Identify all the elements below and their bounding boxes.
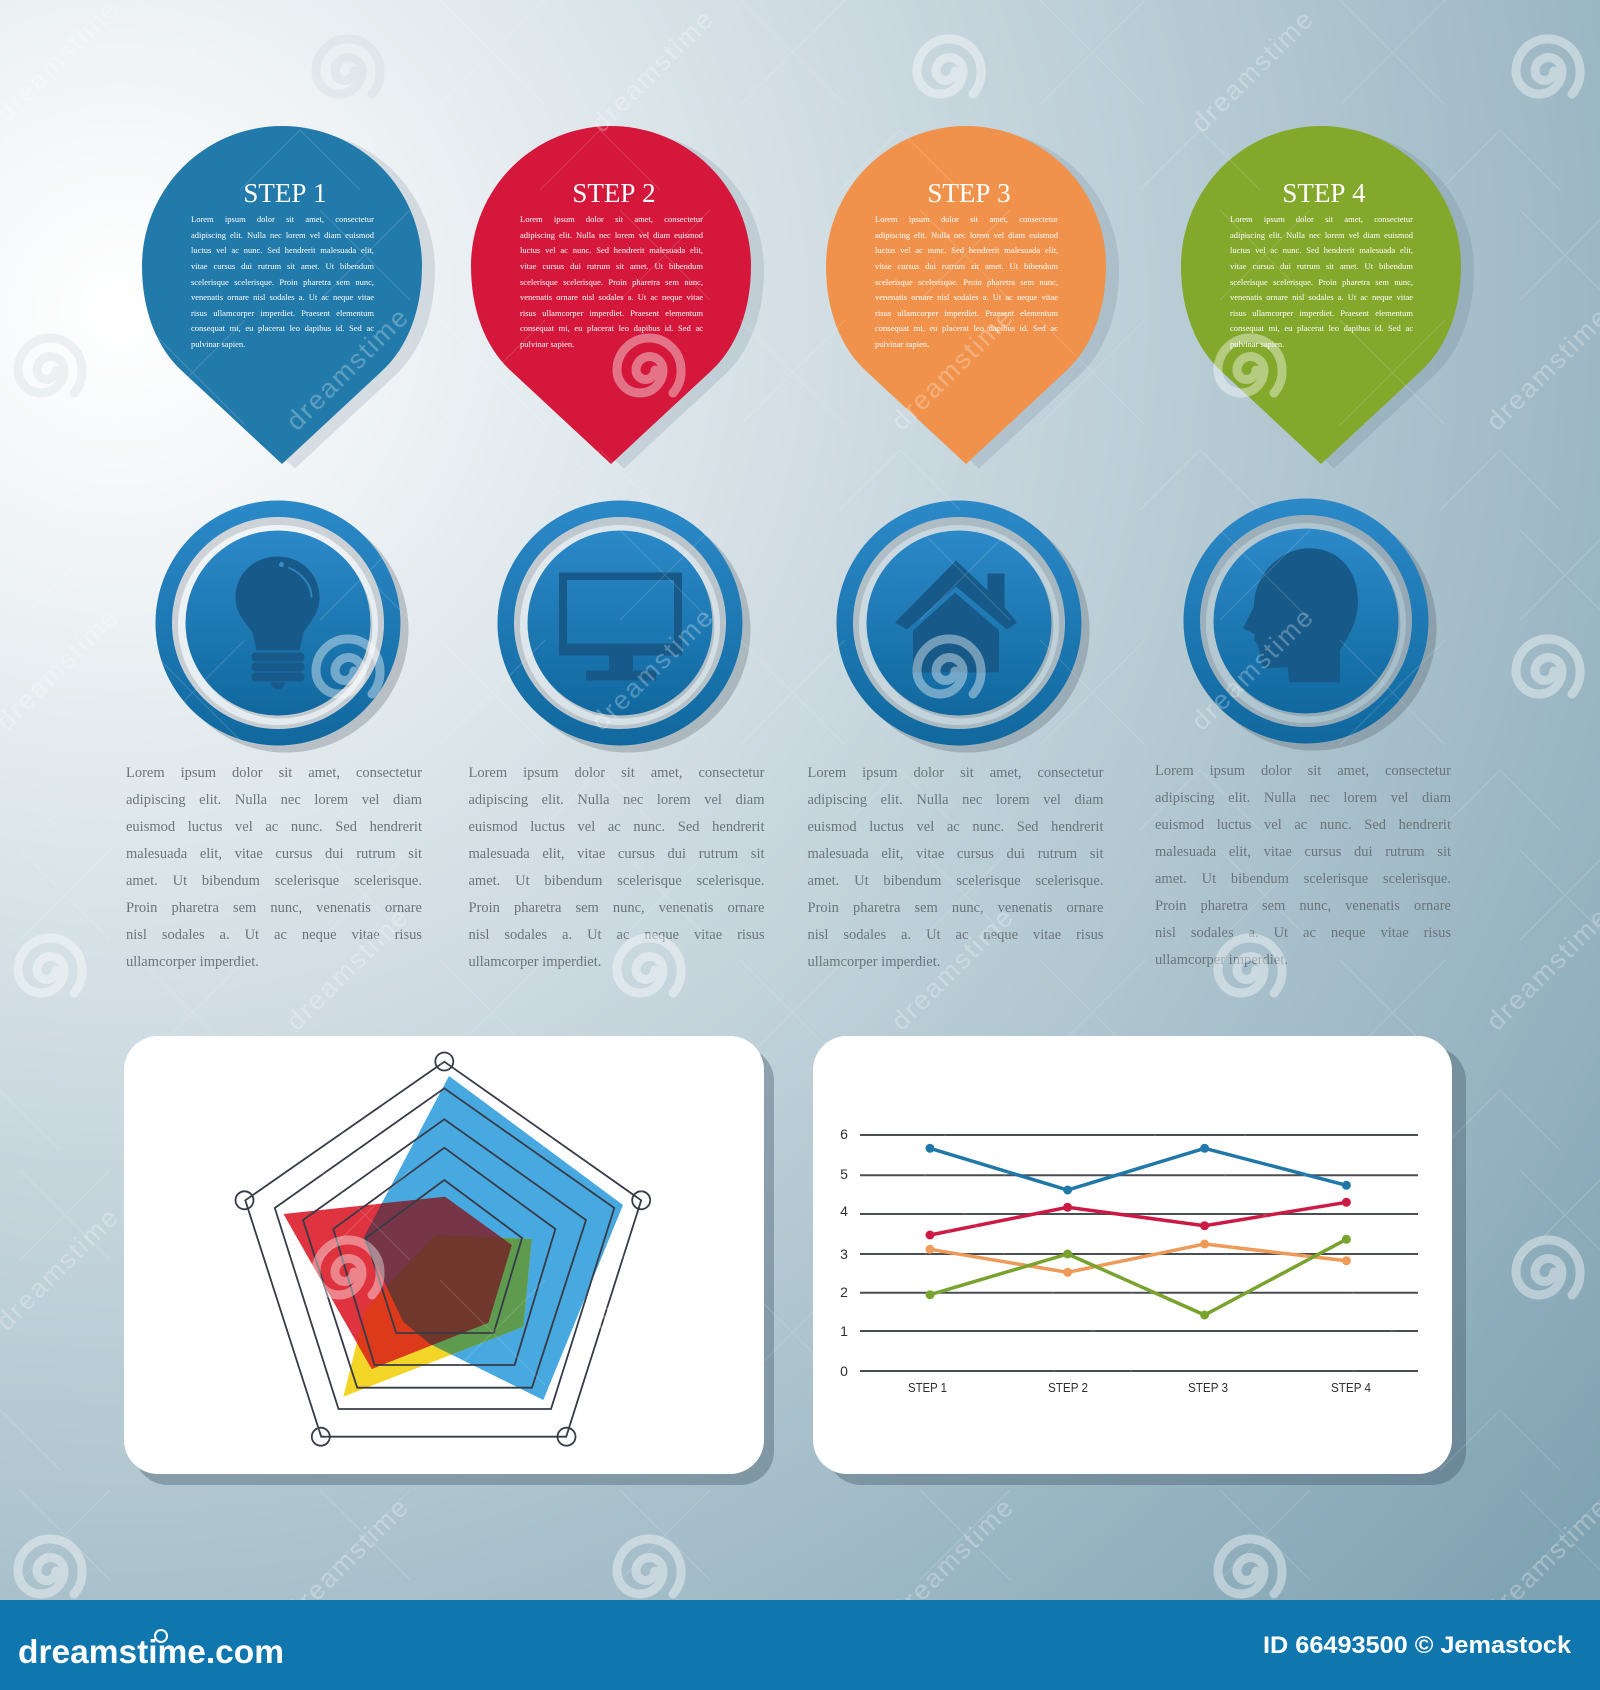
text block: paragraph 4: malesuada elit, vitae cursus dui rutrum sit [1155, 844, 1451, 860]
icon disc: house [836, 500, 1090, 752]
text block: paragraph 2: euismod luctus vel ac nunc. Sed hendrerit [468, 819, 764, 835]
text block: step 3 [875, 214, 1058, 349]
text block: paragraph 1: euismod luctus vel ac nunc. Sed hendrerit [126, 819, 422, 835]
chart axes: grid lines [860, 1135, 1418, 1371]
y axis labels: 1 [840, 1323, 848, 1339]
image id credit: ID 66493500 © Jemastock [1263, 1632, 1572, 1659]
text block: paragraph 2: ullamcorper imperdiet. [468, 954, 601, 970]
text block: paragraph 4: euismod luctus vel ac nunc. Sed hendrerit [1155, 817, 1451, 833]
x axis labels: STEP 3 [1188, 1380, 1228, 1395]
text block: step 4: venenatis ornare nisl sodales a. Ut ac neque vitae [1230, 292, 1413, 302]
y axis labels: 0 [840, 1363, 848, 1379]
panel: step 3 pin [826, 126, 1119, 468]
text block: paragraph 1: ullamcorper imperdiet. [126, 954, 259, 970]
text block: paragraph 1 [126, 764, 422, 970]
heading: step 3: STEP 3 [927, 178, 1011, 208]
x axis labels: STEP 1 [908, 1380, 947, 1395]
heading: step 1: STEP 1 [243, 178, 327, 208]
chart axes: radar grid [236, 1052, 650, 1446]
text block: step 3: luctus vel ac nunc. Sed hendrerit malesuada elit, [875, 245, 1058, 255]
panel: step 2 pin [471, 126, 764, 468]
text block: step 1: venenatis ornare nisl sodales a. Ut ac neque vitae [191, 292, 374, 302]
x axis labels: STEP 4 [1331, 1380, 1371, 1395]
text block: step 3: Lorem ipsum dolor sit amet, consectetur [875, 214, 1058, 224]
panel: radar chart card [124, 1036, 764, 1474]
text block: step 4: consequat mi, eu placerat leo dapibus id. Sed ac [1230, 323, 1413, 333]
text block: step 4: Lorem ipsum dolor sit amet, consectetur [1230, 214, 1413, 224]
text block: step 3: risus ullamcorper imperdiet. Praesent elementum [875, 308, 1058, 318]
text block: step 4: adipiscing elit. Nulla nec lorem vel diam euismod [1230, 230, 1413, 240]
text block: step 3: adipiscing elit. Nulla nec lorem vel diam euismod [875, 230, 1058, 240]
y axis labels: 5 [840, 1166, 848, 1182]
line series: blue [926, 1144, 1351, 1194]
watermark overlay: dreamstime [1185, 3, 1320, 138]
text block: step 4: luctus vel ac nunc. Sed hendrerit malesuada elit, [1230, 245, 1413, 255]
text block: paragraph 4: ullamcorper imperdiet. [1155, 952, 1288, 968]
x axis labels: STEP 2 [1048, 1380, 1088, 1395]
icon disc: head [1184, 498, 1436, 750]
line series: orange [926, 1240, 1351, 1277]
text block: paragraph 4: amet. Ut bibendum scelerisque scelerisque. [1155, 871, 1451, 887]
text block: step 4: vitae cursus dui rutrum sit amet. Ut bibendum [1230, 261, 1413, 271]
y axis labels: 6 [840, 1126, 848, 1142]
text block: paragraph 4: Lorem ipsum dolor sit amet, consectetur [1155, 762, 1451, 778]
icon: light bulb [235, 556, 319, 689]
chart series: radar areas [284, 1076, 623, 1400]
text block: paragraph 3: Lorem ipsum dolor sit amet, consectetur [808, 764, 1104, 780]
text block: paragraph 2: Lorem ipsum dolor sit amet, consectetur [468, 764, 764, 780]
logo mark [155, 1630, 167, 1642]
text block: paragraph 1: nisl sodales a. Ut ac neque vitae risus [126, 927, 422, 943]
text block: paragraph 1: adipiscing elit. Nulla nec lorem vel diam [126, 792, 422, 808]
text block: paragraph 2: nisl sodales a. Ut ac neque vitae risus [468, 927, 764, 943]
watermark overlay: dreamstime [885, 901, 1020, 1036]
text block: step 1: luctus vel ac nunc. Sed hendrerit malesuada elit, [191, 245, 374, 255]
y axis labels: 4 [840, 1203, 848, 1219]
y axis labels: 3 [840, 1246, 848, 1262]
line series: red [926, 1198, 1351, 1240]
watermark overlay: dreamstime [585, 3, 720, 138]
text block: step 2: scelerisque scelerisque. Proin pharetra sem nunc, [520, 276, 703, 286]
x axis labels [908, 1380, 1371, 1395]
icon: computer monitor [559, 572, 682, 680]
watermark overlay: dreamstime [585, 1201, 720, 1336]
text block: paragraph 2: adipiscing elit. Nulla nec lorem vel diam [468, 792, 764, 808]
logo text: dreamstime.com [18, 1633, 284, 1670]
text block: step 1: scelerisque scelerisque. Proin pharetra sem nunc, [191, 276, 374, 286]
text block: step 4: pulvinar sapien. [1230, 339, 1284, 349]
y axis labels [840, 1126, 848, 1379]
panel: line chart card [813, 1036, 1452, 1474]
panel: step 1 pin [142, 126, 435, 468]
text block: paragraph 4: adipiscing elit. Nulla nec lorem vel diam [1155, 790, 1451, 806]
text block: paragraph 2: malesuada elit, vitae cursus dui rutrum sit [468, 846, 764, 862]
watermark overlay: dreamstime [885, 301, 1020, 436]
text block: paragraph 3: amet. Ut bibendum scelerisque scelerisque. [808, 873, 1104, 889]
text block: step 1 [191, 214, 374, 349]
panel: step 4 pin [1181, 126, 1474, 468]
text block: step 3: venenatis ornare nisl sodales a. Ut ac neque vitae [875, 292, 1058, 302]
text block: step 4: risus ullamcorper imperdiet. Praesent elementum [1230, 308, 1413, 318]
text block: paragraph 3: malesuada elit, vitae cursus dui rutrum sit [808, 846, 1104, 862]
text block: paragraph 2 [468, 764, 764, 970]
text block: paragraph 3 [808, 764, 1104, 970]
icon: human head profile [1243, 548, 1358, 682]
text block: paragraph 3: adipiscing elit. Nulla nec lorem vel diam [808, 792, 1104, 808]
text block: paragraph 3: Proin pharetra sem nunc, venenatis ornare [808, 900, 1104, 916]
y axis labels: 2 [840, 1284, 848, 1300]
text block: step 4 [1230, 214, 1413, 349]
heading: step 2: STEP 2 [572, 178, 656, 208]
text block: step 3: scelerisque scelerisque. Proin pharetra sem nunc, [875, 276, 1058, 286]
text block: step 2: pulvinar sapien. [520, 339, 574, 349]
watermark overlay: dreamstime [585, 601, 720, 736]
text block: step 2: vitae cursus dui rutrum sit amet. Ut bibendum [520, 261, 703, 271]
text block: step 3: vitae cursus dui rutrum sit amet. Ut bibendum [875, 261, 1058, 271]
text block: paragraph 3: ullamcorper imperdiet. [808, 954, 940, 970]
icon: house [895, 560, 1017, 672]
text block: step 1: consequat mi, eu placerat leo dapibus id. Sed ac [191, 323, 374, 333]
text block: step 1: vitae cursus dui rutrum sit amet. Ut bibendum [191, 261, 374, 271]
text block: paragraph 4: nisl sodales a. Ut ac neque vitae risus [1155, 925, 1451, 941]
text block: step 1: Lorem ipsum dolor sit amet, consectetur [191, 214, 374, 224]
text block: step 2 [520, 214, 703, 349]
text block: paragraph 1: Lorem ipsum dolor sit amet, consectetur [126, 764, 422, 780]
text block: paragraph 1: malesuada elit, vitae cursus dui rutrum sit [126, 846, 422, 862]
text block: step 2: luctus vel ac nunc. Sed hendrerit malesuada elit, [520, 245, 703, 255]
text block: paragraph 3: nisl sodales a. Ut ac neque vitae risus [808, 927, 1104, 943]
text block: step 4: scelerisque scelerisque. Proin pharetra sem nunc, [1230, 276, 1413, 286]
text block: paragraph 3: euismod luctus vel ac nunc. Sed hendrerit [808, 819, 1104, 835]
text block: step 1: risus ullamcorper imperdiet. Praesent elementum [191, 308, 374, 318]
text block: paragraph 1: amet. Ut bibendum scelerisque scelerisque. [126, 873, 422, 889]
text block: paragraph 4: Proin pharetra sem nunc, venenatis ornare [1155, 898, 1451, 914]
text block: paragraph 2: amet. Ut bibendum scelerisque scelerisque. [468, 873, 764, 889]
watermark overlay: dreamstime [1185, 601, 1320, 736]
text block: paragraph 2: Proin pharetra sem nunc, venenatis ornare [468, 900, 764, 916]
text block: step 2: Lorem ipsum dolor sit amet, consectetur [520, 214, 703, 224]
text block: step 2: risus ullamcorper imperdiet. Praesent elementum [520, 308, 703, 318]
text block: step 3: pulvinar sapien. [875, 339, 929, 349]
text block: step 2: consequat mi, eu placerat leo dapibus id. Sed ac [520, 323, 703, 333]
text block: step 1: adipiscing elit. Nulla nec lorem vel diam euismod [191, 230, 374, 240]
heading: step 4: STEP 4 [1282, 178, 1366, 208]
icon disc: light bulb [156, 500, 408, 752]
text block: paragraph 1: Proin pharetra sem nunc, venenatis ornare [126, 900, 422, 916]
text block: step 2: adipiscing elit. Nulla nec lorem vel diam euismod [520, 230, 703, 240]
text block: step 3: consequat mi, eu placerat leo dapibus id. Sed ac [875, 323, 1058, 333]
text block: step 2: venenatis ornare nisl sodales a. Ut ac neque vitae [520, 292, 703, 302]
watermark overlay: dreamstime [280, 901, 415, 1036]
footer bar [0, 1600, 1600, 1690]
watermark overlay: dreamstime [280, 301, 415, 436]
line series: green [926, 1235, 1351, 1320]
text block: step 1: pulvinar sapien. [191, 339, 245, 349]
text block: paragraph 4 [1155, 762, 1451, 968]
icon disc: monitor [498, 500, 750, 752]
